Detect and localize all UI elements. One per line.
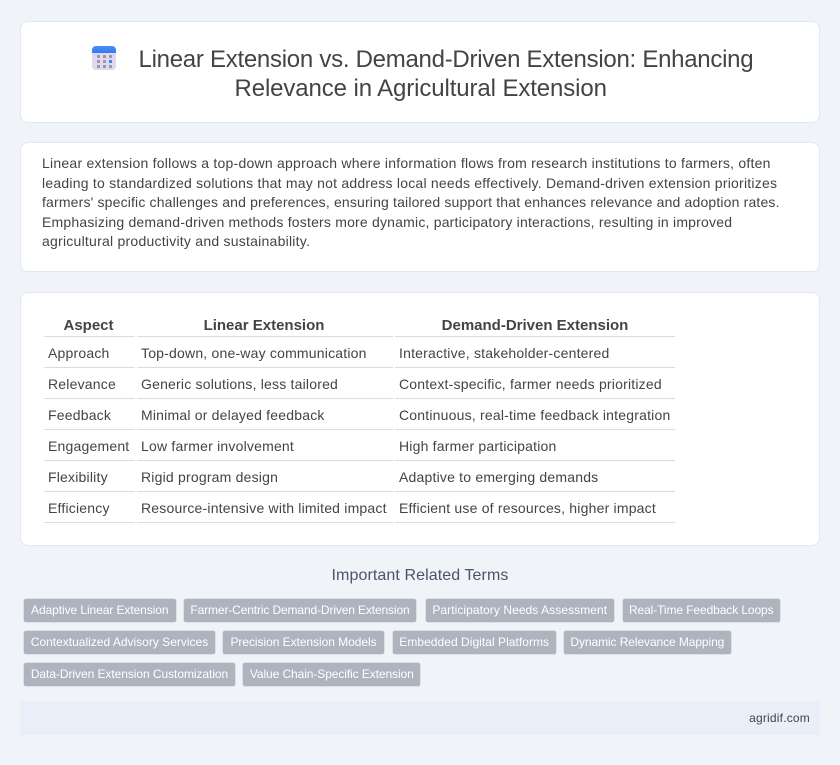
- tag: [222, 630, 385, 655]
- tag: Participatory Needs Assessment: [432, 603, 607, 617]
- tag: [622, 598, 781, 623]
- table header: Linear Extension: [204, 317, 324, 334]
- row: flexibility: Adaptive to emerging demands: [399, 469, 598, 485]
- title: [138, 46, 753, 102]
- icon: calendar: [92, 46, 116, 70]
- row: feedback: [48, 407, 670, 423]
- tag: Value Chain-Specific Extension: [250, 667, 414, 681]
- row: engagement: Engagement: [48, 438, 129, 454]
- row: efficiency: Efficiency: [48, 500, 110, 516]
- tag: Farmer-Centric Demand-Driven Extension: [190, 603, 410, 617]
- row: efficiency: [48, 500, 656, 516]
- row: approach: Approach: [48, 345, 110, 361]
- tag: [424, 598, 615, 623]
- tag: Real-Time Feedback Loops: [629, 603, 774, 617]
- row: feedback: Minimal or delayed feedback: [141, 407, 325, 423]
- tag: [183, 598, 417, 623]
- row: efficiency: Efficient use of resources, higher impact: [399, 500, 656, 516]
- footer source: agridif.com: [749, 711, 810, 725]
- row: engagement: [48, 438, 557, 454]
- tag: Contextualized Advisory Services: [31, 635, 208, 649]
- row: efficiency: Resource-intensive with limited impact: [141, 500, 387, 516]
- row: engagement: Low farmer involvement: [141, 438, 294, 454]
- row: flexibility: Flexibility: [48, 469, 108, 485]
- row: relevance: Generic solutions, less tailored: [141, 376, 338, 392]
- tag: [23, 662, 236, 687]
- tag: [563, 630, 732, 655]
- heading: related terms: Important Related Terms: [332, 567, 508, 584]
- table header: [63, 317, 628, 334]
- tag: Precision Extension Models: [230, 635, 377, 649]
- panel: introduction: [20, 142, 820, 272]
- row: flexibility: [48, 469, 598, 485]
- intro text: [42, 155, 780, 249]
- tag: [23, 630, 216, 655]
- table header: Aspect: [63, 317, 114, 334]
- title: Linear Extension vs. Demand-Driven Extension: Enhancing: [138, 46, 753, 73]
- panel: title header: [20, 21, 820, 123]
- intro text: leading to standardized solutions that may not address local needs effectively. Demand-driven extension prioritizes: [42, 174, 777, 190]
- intro text: farmers' specific challenges and preferences, ensuring tailored support that enhances relevance and adoption rates.: [42, 194, 780, 210]
- tag: [23, 598, 176, 623]
- row: engagement: High farmer participation: [399, 438, 557, 454]
- row: feedback: Continuous, real-time feedback integration: [399, 407, 670, 423]
- tag: Adaptive Linear Extension: [31, 603, 168, 617]
- intro text: agricultural productivity and sustainability.: [42, 233, 310, 249]
- intro text: Emphasizing demand-driven methods fosters more dynamic, participatory interactions, resulting in improved: [42, 214, 732, 230]
- row: approach: [48, 345, 610, 361]
- panel: comparison table: [20, 292, 820, 546]
- tag: Dynamic Relevance Mapping: [570, 635, 724, 649]
- tag: [242, 662, 421, 687]
- tag: [392, 630, 557, 655]
- row: approach: Top-down, one-way communication: [141, 345, 367, 361]
- footer: [20, 701, 820, 735]
- intro text: Linear extension follows a top-down approach where information flows from research institutions to farmers, often: [42, 155, 771, 171]
- row: flexibility: Rigid program design: [141, 469, 278, 485]
- row: relevance: [48, 376, 662, 392]
- row: relevance: Relevance: [48, 376, 116, 392]
- row: feedback: Feedback: [48, 407, 111, 423]
- tag: Embedded Digital Platforms: [399, 635, 549, 649]
- table header: Demand-Driven Extension: [442, 317, 628, 334]
- row: approach: Interactive, stakeholder-centered: [399, 345, 610, 361]
- tags: related terms: [23, 598, 781, 687]
- row: relevance: Context-specific, farmer needs prioritized: [399, 376, 662, 392]
- tag: Data-Driven Extension Customization: [31, 667, 228, 681]
- title: Relevance in Agricultural Extension: [234, 75, 607, 102]
